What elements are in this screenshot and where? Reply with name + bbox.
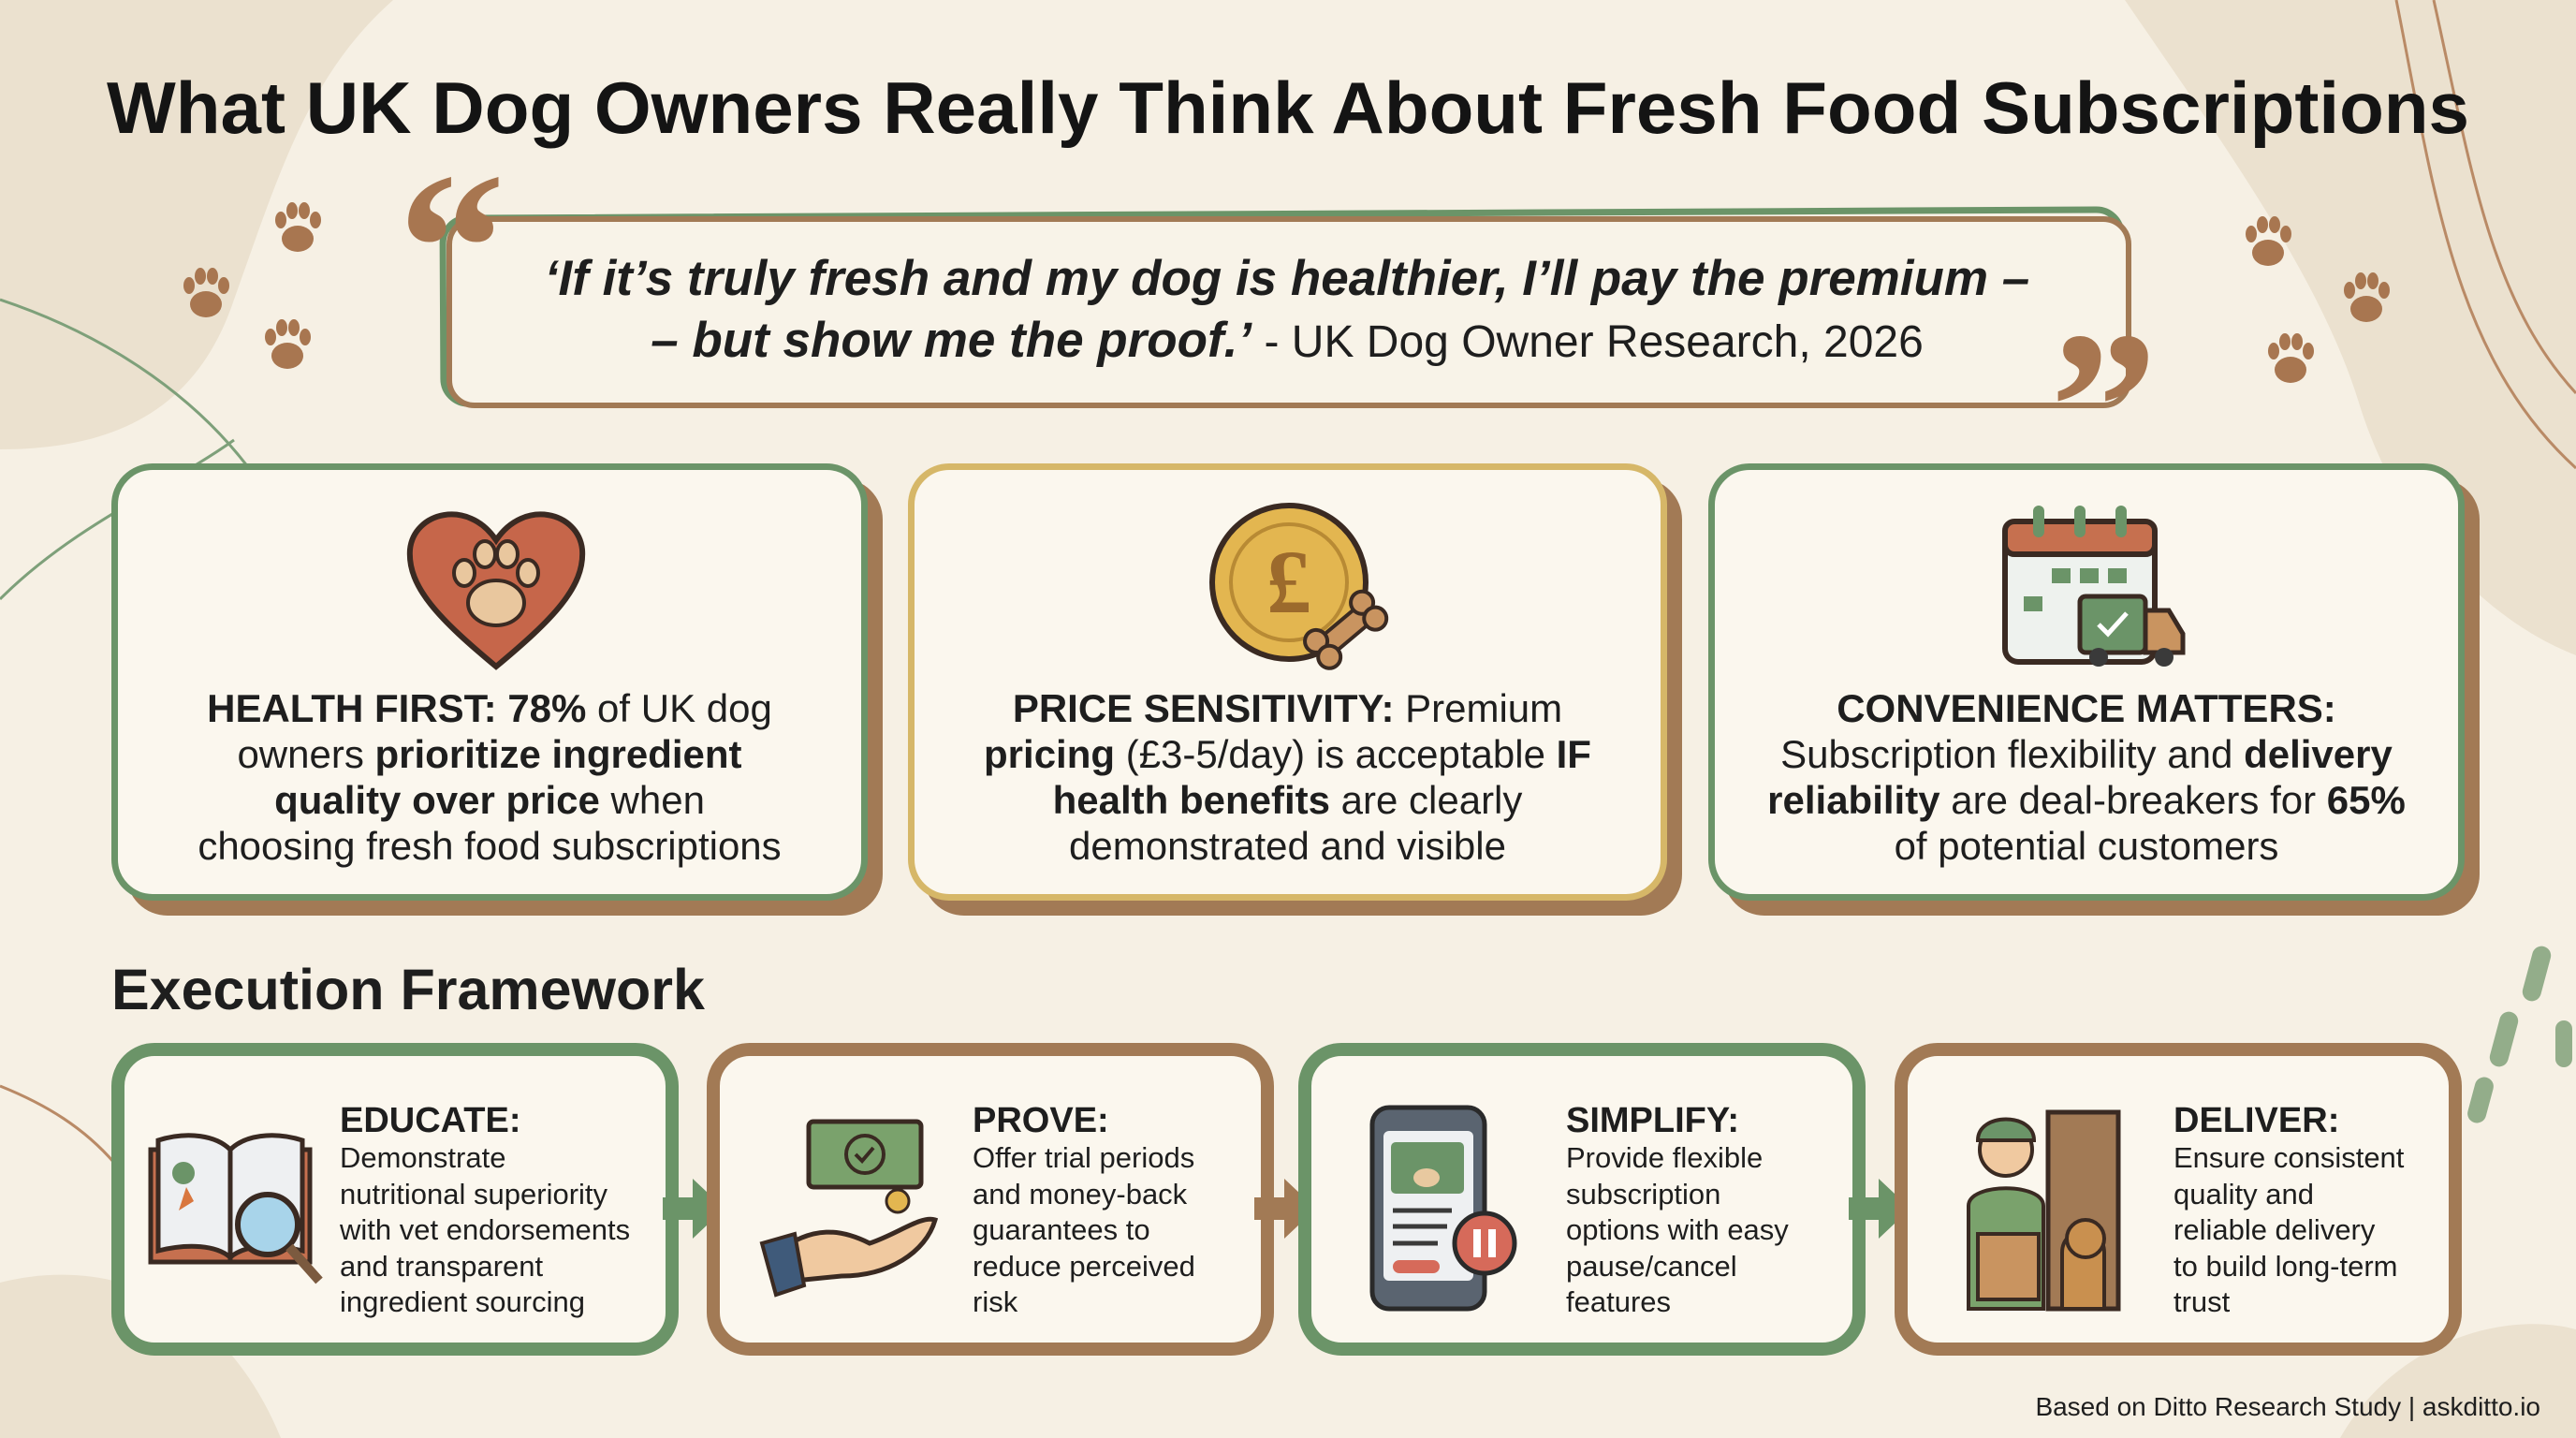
panel: simplify: options with easy	[1566, 1213, 1789, 1246]
panel: prove: risk	[973, 1285, 1017, 1318]
text: educate: EDUCATE:	[340, 1101, 521, 1140]
text: price sensitivity	[984, 686, 1591, 868]
quote text: ‘If it’s truly fresh and my dog is healthier, I’ll pay the premium –	[545, 251, 2029, 306]
text: convenience matters	[1767, 686, 2406, 868]
arrow	[1849, 1179, 1895, 1239]
footer: source: Based on Ditto Research Study | askditto.io	[2035, 1392, 2540, 1421]
quote text: – but show me the proof.’ - UK Dog Owner Research, 2026	[651, 313, 1924, 368]
arrow	[1254, 1179, 1298, 1239]
text: health first: quality over price when	[274, 778, 705, 822]
quote box	[440, 206, 2131, 408]
panel: deliver: trust	[2174, 1285, 2230, 1318]
panel: prove	[707, 1043, 1274, 1356]
quote text	[545, 251, 2029, 368]
text: health first: owners prioritize ingredient	[237, 732, 742, 776]
panel: prove: guarantees to	[973, 1213, 1150, 1246]
text: price sensitivity: demonstrated and visible	[1069, 824, 1506, 868]
text: health first: HEALTH FIRST: 78% of UK dog	[207, 686, 772, 730]
text: price sensitivity: health benefits are clearly	[1053, 778, 1522, 822]
icon: heart with paw	[406, 511, 586, 670]
panel: deliver: quality and	[2174, 1178, 2314, 1210]
panel: simplify: features	[1566, 1285, 1671, 1318]
text: deliver: DELIVER:	[2174, 1101, 2339, 1140]
text: price sensitivity: PRICE SENSITIVITY: Premium	[1013, 686, 1562, 730]
icon: pound coin with bone: £	[1266, 532, 1311, 632]
text: convenience matters: CONVENIENCE MATTERS:	[1837, 686, 2336, 730]
panel: convenience matters	[1708, 463, 2465, 901]
text: prove: PROVE:	[973, 1101, 1109, 1140]
text: convenience matters: reliability are deal-breakers for 65%	[1767, 778, 2406, 822]
panel: deliver: Ensure consistent	[2174, 1141, 2404, 1174]
panel: simplify: subscription	[1566, 1178, 1720, 1210]
icon: right quote mark: ”	[2050, 287, 2158, 526]
panel: educate: Demonstrate	[340, 1141, 505, 1174]
panel: prove: Offer trial periods	[973, 1141, 1194, 1174]
icon: phone with pause	[1370, 1105, 1516, 1311]
panel: simplify	[1298, 1043, 1866, 1356]
icon: pound coin with bone	[1209, 503, 1389, 670]
text: health first: choosing fresh food subscriptions	[198, 824, 782, 868]
heading: execution framework: Execution Framework	[111, 958, 705, 1021]
panel: educate	[111, 1043, 679, 1356]
panel: educate: ingredient sourcing	[340, 1285, 585, 1318]
icon: money in hand	[760, 1120, 938, 1298]
panel: deliver: reliable delivery	[2174, 1213, 2375, 1246]
paw prints	[183, 202, 2390, 383]
icon: book with magnifier	[148, 1133, 323, 1284]
text: price sensitivity: pricing (£3-5/day) is acceptable IF	[984, 732, 1591, 776]
panel: price sensitivity	[908, 463, 1667, 901]
icon: calendar with truck	[2002, 506, 2185, 667]
icon: left quote mark: “	[398, 128, 505, 367]
text: health first	[198, 686, 782, 868]
panel: prove: reduce perceived	[973, 1249, 1195, 1283]
arrow	[663, 1179, 707, 1239]
text: simplify: SIMPLIFY:	[1566, 1101, 1739, 1140]
panel: simplify: pause/cancel	[1566, 1249, 1737, 1283]
icon: courier with dog	[1967, 1110, 2121, 1311]
panel: simplify: Provide flexible	[1566, 1141, 1763, 1174]
panel: educate: with vet endorsements	[340, 1213, 630, 1246]
panel: prove: and money-back	[973, 1178, 1187, 1210]
text: convenience matters: Subscription flexibility and delivery	[1780, 732, 2393, 776]
panel: educate: nutritional superiority	[340, 1178, 607, 1210]
title: What UK Dog Owners Really Think About Fresh Food Subscriptions	[107, 66, 2469, 149]
panel: health first	[111, 463, 868, 901]
panel: deliver	[1895, 1043, 2462, 1356]
text: convenience matters: of potential customers	[1895, 824, 2278, 868]
panel: educate: and transparent	[340, 1249, 543, 1283]
panel: deliver: to build long-term	[2174, 1249, 2398, 1283]
